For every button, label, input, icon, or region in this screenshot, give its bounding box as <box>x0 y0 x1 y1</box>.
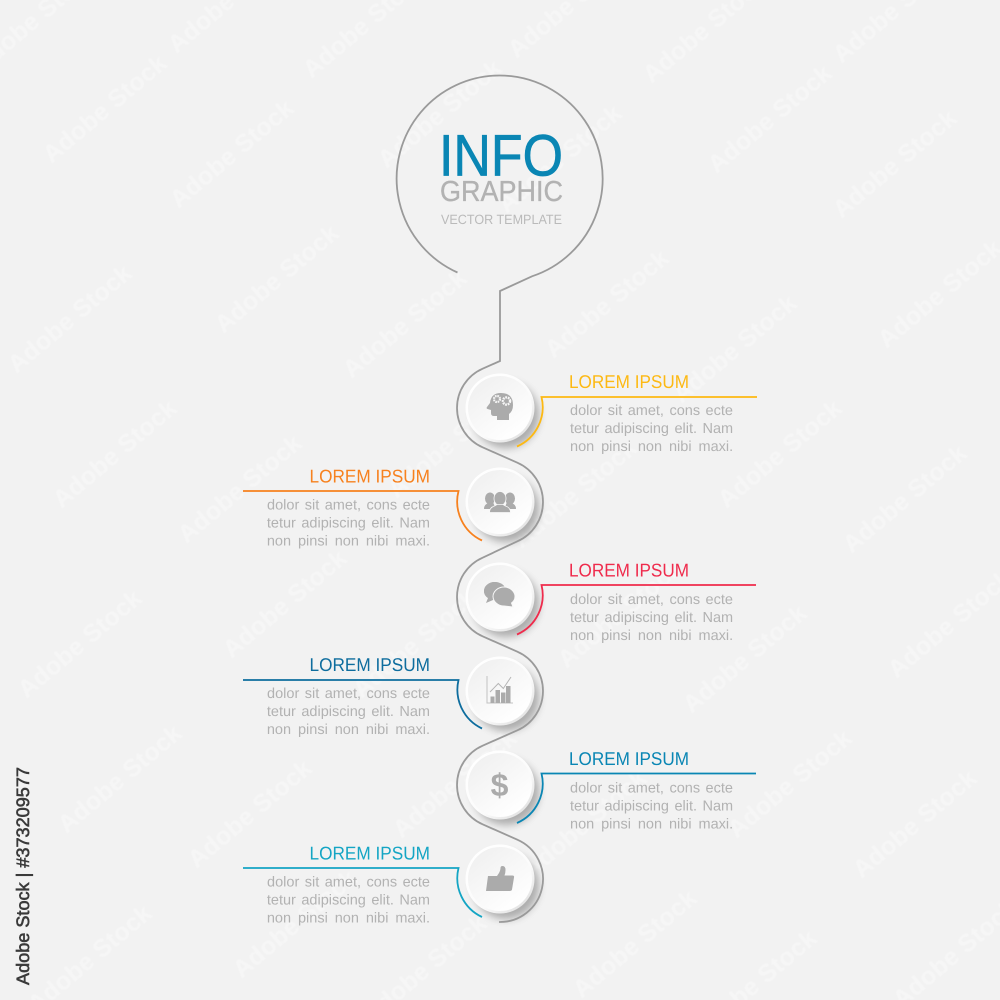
watermark pattern: Adobe Stock <box>227 864 362 984</box>
watermark pattern: Adobe Stock <box>217 544 352 664</box>
disc 4 <box>466 656 539 731</box>
watermark pattern: Adobe Stock <box>209 219 344 339</box>
watermark pattern: Adobe Stock <box>387 724 522 844</box>
title: INFO: INFO <box>439 124 563 188</box>
body 5: dolor sit amet, cons ecte <box>570 780 733 796</box>
icon: bar chart <box>487 676 513 703</box>
caption: vector template: VECTOR TEMPLATE <box>441 212 562 227</box>
heading 4: LOREM IPSUM <box>310 654 430 675</box>
icon: dollar: $ <box>491 767 509 803</box>
watermark pattern: Adobe Stock <box>347 584 482 704</box>
body 6: tetur adipiscing elit. Nam <box>267 892 430 908</box>
winding timeline line with title circle <box>397 76 603 922</box>
watermark pattern: Adobe Stock <box>492 99 627 219</box>
body 6: non pinsi non nibi maxi. <box>267 910 430 926</box>
step discs <box>466 374 539 919</box>
watermark pattern: Adobe Stock <box>677 599 812 719</box>
step 5 <box>491 748 756 832</box>
watermark pattern: Adobe Stock <box>847 764 982 884</box>
watermark pattern: Adobe Stock <box>2 259 137 379</box>
body 4: dolor sit amet, cons ecte <box>267 686 430 702</box>
watermark pattern: Adobe Stock <box>382 384 517 504</box>
step 3 <box>484 560 756 644</box>
step 2 <box>243 466 516 550</box>
connector 1 <box>517 397 757 446</box>
connector 4 <box>243 680 482 728</box>
heading 1: LOREM IPSUM <box>569 371 689 392</box>
watermark pattern: Adobe Stock <box>37 49 172 169</box>
watermark pattern: Adobe Stock <box>182 754 317 874</box>
step 4 <box>243 654 513 738</box>
disc 5 <box>466 750 539 825</box>
connector 5 <box>517 774 756 823</box>
body 5: tetur adipiscing elit. Nam <box>570 798 733 814</box>
watermark pattern: Adobe Stock <box>507 434 642 554</box>
body 3: non pinsi non nibi maxi. <box>570 628 733 644</box>
heading 6: LOREM IPSUM <box>310 842 430 864</box>
icon: speech bubbles <box>484 582 515 607</box>
icon: head with gears <box>487 393 513 420</box>
watermark pattern: Adobe Stock <box>702 59 837 179</box>
watermark pattern: Adobe Stock <box>712 394 847 514</box>
watermark pattern: Adobe Stock <box>172 429 307 549</box>
connector 3 <box>517 585 756 634</box>
watermark pattern: Adobe Stock <box>722 724 857 844</box>
heading 3: LOREM IPSUM <box>569 560 689 580</box>
connector 6 <box>243 868 482 917</box>
watermark pattern: Adobe Stock <box>827 104 962 224</box>
watermark pattern: Adobe Stock <box>52 719 187 839</box>
body 3: tetur adipiscing elit. Nam <box>570 610 733 626</box>
watermark pattern: Adobe Stock <box>552 554 687 674</box>
watermark pattern: Adobe Stock <box>539 244 674 364</box>
heading 2: LOREM IPSUM <box>310 466 430 486</box>
title block <box>439 124 563 227</box>
body 4: non pinsi non nibi maxi. <box>267 722 430 738</box>
disc 6 <box>466 844 539 919</box>
subtitle: GRAPHIC: GRAPHIC <box>440 176 563 208</box>
watermark pattern: Adobe Stock <box>47 394 182 514</box>
watermark pattern: Adobe Stock <box>12 584 147 704</box>
heading 5: LOREM IPSUM <box>569 748 689 769</box>
body 4: tetur adipiscing elit. Nam <box>267 704 430 720</box>
icon: people <box>484 492 516 512</box>
watermark pattern: Adobe Stock <box>337 264 472 384</box>
watermark pattern: Adobe Stock <box>517 764 652 884</box>
body 1: non pinsi non nibi maxi. <box>570 439 733 455</box>
disc 2 <box>466 468 539 542</box>
step 6 <box>243 842 514 926</box>
watermark pattern: Adobe Stock <box>837 439 972 559</box>
body 2: non pinsi non nibi maxi. <box>267 534 430 550</box>
step 1 <box>487 371 757 455</box>
body 5: non pinsi non nibi maxi. <box>570 816 733 832</box>
disc 1 <box>466 374 539 448</box>
watermark pattern: Adobe Stock <box>372 54 507 174</box>
body 1: dolor sit amet, cons ecte <box>570 403 733 419</box>
body 1: tetur adipiscing elit. Nam <box>570 421 733 437</box>
watermark pattern: Adobe Stock <box>164 94 299 214</box>
connector 2 <box>243 491 482 540</box>
watermark pattern: Adobe Stock <box>667 289 802 409</box>
body 2: dolor sit amet, cons ecte <box>267 498 430 514</box>
icon: thumbs up <box>486 866 514 891</box>
disc 3 <box>466 562 539 637</box>
body 3: dolor sit amet, cons ecte <box>570 592 733 608</box>
stock id label: Adobe Stock | #373209577 <box>13 767 33 985</box>
body 6: dolor sit amet, cons ecte <box>267 874 430 890</box>
body 2: tetur adipiscing elit. Nam <box>267 516 430 532</box>
